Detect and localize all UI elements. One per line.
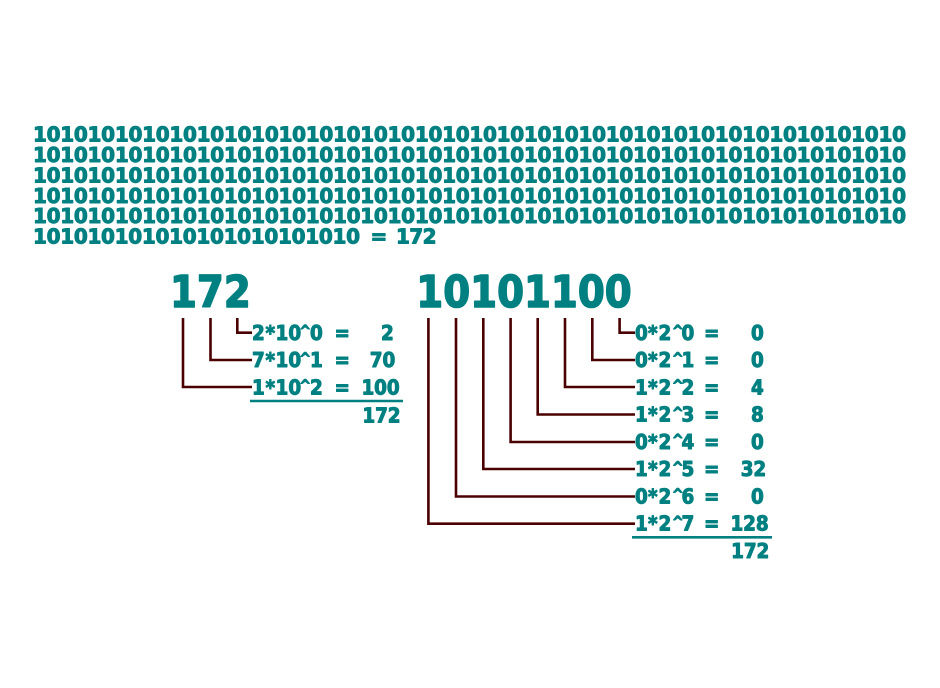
decimal expansion: 0 bbox=[310, 321, 323, 345]
decimal expansion: 1*10 bbox=[252, 376, 301, 400]
binary expansion: 32 bbox=[741, 457, 766, 481]
binary expansion: 3 bbox=[681, 403, 694, 427]
binary expansion: = bbox=[704, 403, 719, 427]
binary string equal to 172: 1010101010101010101010101010101010101010101010101010101010101010 bbox=[33, 122, 906, 146]
binary string equal to 172: 1010101010101010101010101010101010101010101010101010101010101010 bbox=[33, 163, 906, 187]
binary connector lines bbox=[428, 318, 635, 524]
binary expansion: 0 bbox=[751, 430, 764, 454]
decimal expansion: = bbox=[335, 348, 350, 372]
decimal expansion: = bbox=[335, 321, 350, 345]
binary expansion: 6 bbox=[681, 485, 694, 509]
binary expansion: 1*2 bbox=[635, 512, 671, 536]
decimal expansion: 2 bbox=[310, 376, 323, 400]
binary string equal to 172: = bbox=[370, 225, 387, 249]
binary expansion: = bbox=[704, 348, 719, 372]
binary expansion: 4 bbox=[751, 376, 764, 400]
binary string equal to 172: 1010101010101010101010101010101010101010101010101010101010101010 bbox=[33, 184, 906, 208]
binary expansion: ^ bbox=[672, 487, 684, 504]
binary expansion: 7 bbox=[681, 512, 694, 536]
binary expansion: 128 bbox=[730, 512, 769, 536]
decimal expansion: ^ bbox=[299, 324, 311, 340]
binary expansion bbox=[632, 321, 772, 563]
decimal expansion: 7*10 bbox=[252, 348, 301, 372]
decimal expansion: ^ bbox=[299, 351, 311, 368]
binary expansion: ^ bbox=[672, 324, 684, 340]
decimal expansion: 2 bbox=[381, 321, 394, 345]
binary expansion: 0*2 bbox=[635, 348, 671, 372]
binary expansion: 0*2 bbox=[635, 321, 671, 345]
binary expansion: 0 bbox=[751, 348, 764, 372]
binary expansion: = bbox=[704, 376, 719, 400]
binary expansion: = bbox=[704, 321, 719, 345]
decimal expansion: ^ bbox=[299, 378, 311, 395]
binary string equal to 172: 101010101010101010101010 bbox=[33, 225, 360, 249]
binary expansion: 1*2 bbox=[635, 457, 671, 481]
binary expansion: = bbox=[704, 430, 719, 454]
binary expansion: 0 bbox=[751, 321, 764, 345]
binary expansion: = bbox=[704, 485, 719, 509]
binary string equal to 172: 1010101010101010101010101010101010101010101010101010101010101010 bbox=[33, 204, 906, 228]
decimal expansion bbox=[250, 321, 403, 428]
binary expansion: ^ bbox=[672, 378, 684, 395]
decimal connector lines bbox=[183, 318, 252, 387]
decimal expansion: 100 bbox=[361, 376, 400, 400]
binary expansion: ^ bbox=[672, 405, 684, 422]
heading: binary 10101100: 10101100 bbox=[416, 266, 632, 317]
binary expansion: 172 bbox=[731, 539, 769, 563]
binary expansion: 4 bbox=[681, 430, 694, 454]
decimal expansion: 2*10 bbox=[252, 321, 301, 345]
binary expansion: ^ bbox=[672, 433, 684, 449]
decimal expansion: 172 bbox=[362, 404, 401, 428]
binary string equal to 172: 1010101010101010101010101010101010101010101010101010101010101010 bbox=[33, 143, 906, 167]
binary expansion: 5 bbox=[681, 457, 694, 481]
binary string equal to 172: 172 bbox=[396, 225, 437, 249]
binary expansion: 1 bbox=[681, 348, 694, 372]
decimal expansion: 70 bbox=[370, 348, 395, 372]
binary expansion: ^ bbox=[672, 351, 684, 368]
binary expansion: 0*2 bbox=[635, 485, 671, 509]
binary expansion: ^ bbox=[672, 514, 684, 531]
binary expansion: 8 bbox=[751, 403, 764, 427]
binary expansion: 0 bbox=[681, 321, 694, 345]
binary string equal to 172 bbox=[33, 122, 906, 249]
binary expansion: 0 bbox=[751, 485, 764, 509]
heading: decimal 172: 172 bbox=[170, 266, 251, 317]
binary expansion: 0*2 bbox=[635, 430, 671, 454]
decimal expansion: = bbox=[335, 376, 350, 400]
binary expansion: 1*2 bbox=[635, 376, 671, 400]
binary expansion: = bbox=[704, 512, 719, 536]
binary expansion: 2 bbox=[681, 376, 694, 400]
binary expansion: ^ bbox=[672, 460, 684, 477]
binary expansion: 1*2 bbox=[635, 403, 671, 427]
binary expansion: = bbox=[704, 457, 719, 481]
decimal expansion: 1 bbox=[310, 348, 323, 372]
